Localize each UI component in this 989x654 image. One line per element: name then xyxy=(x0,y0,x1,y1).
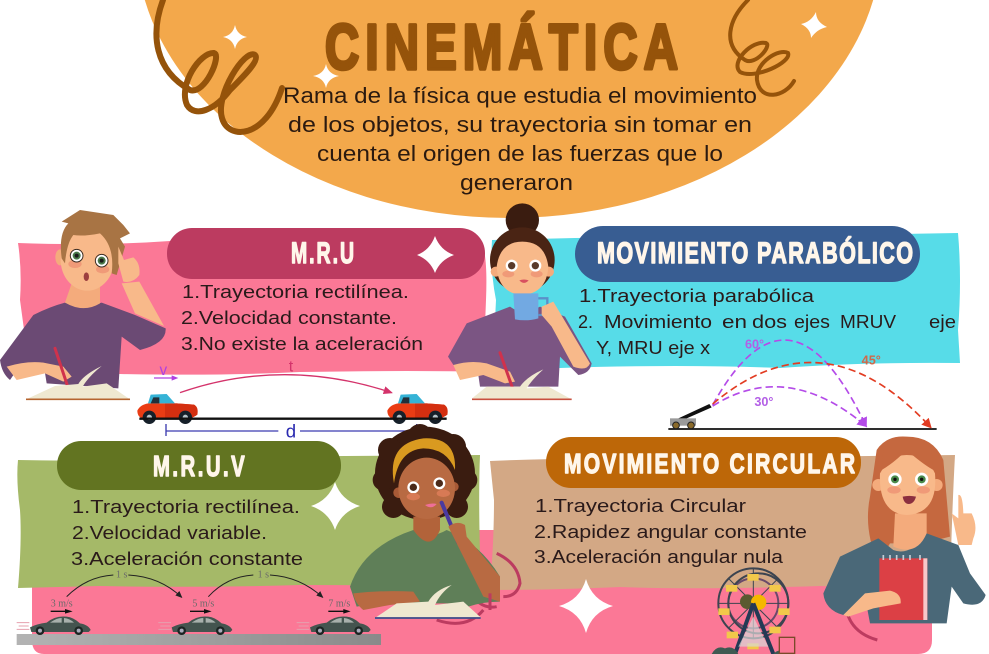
illustration: ferris wheel xyxy=(712,568,795,654)
diagram: uniform motion with cars: d xyxy=(286,420,296,441)
diagram: accelerated motion with cars: 5 m/s xyxy=(192,599,214,610)
list: M.R.U xyxy=(181,282,423,354)
list: circular motion xyxy=(534,496,807,567)
list: parabolic: 2. xyxy=(578,312,593,332)
diagram: uniform motion with cars: t xyxy=(289,359,294,376)
list: M.R.U.V: 1.Trayectoria rectilínea. xyxy=(72,497,300,517)
list: parabolic: eje xyxy=(929,312,956,332)
panel: M.R.U background xyxy=(18,241,487,375)
diagram: projectile trajectories with cannon xyxy=(668,337,937,429)
pill: M.R.U heading: M.R.U xyxy=(291,237,354,270)
diagram: uniform motion with cars xyxy=(137,359,448,441)
list: circular motion: 2.Rapidez angular constante xyxy=(534,522,807,542)
list: parabolic: en xyxy=(722,312,747,332)
decorative curl: left xyxy=(156,0,282,132)
sparkles: header xyxy=(223,12,827,88)
decorative curl: right xyxy=(730,0,794,95)
pill: M.R.U heading xyxy=(167,228,485,279)
list: M.R.U.V: 3.Aceleración constante xyxy=(71,549,303,569)
list: M.R.U: 2.Velocidad constante. xyxy=(181,308,397,328)
list: parabolic: ejes xyxy=(794,312,830,332)
pill: parabolic heading xyxy=(575,226,920,282)
illustration: curly-haired woman with pen xyxy=(350,424,500,623)
header: orange semicircle xyxy=(136,0,882,218)
diagram: projectile trajectories with cannon: 60° xyxy=(745,337,764,351)
panel: parabolic background xyxy=(492,233,960,372)
diagram: accelerated motion with cars: 1 s xyxy=(116,570,127,581)
list: circular motion: 3.Aceleración angular nula xyxy=(534,547,784,567)
diagram: accelerated motion with cars: 7 m/s xyxy=(328,599,350,610)
description text: generaron xyxy=(460,170,573,195)
sparkle: M.R.U pill xyxy=(417,236,454,273)
pill: parabolic heading: MOVIMIENTO PARABÓLICO xyxy=(597,235,913,270)
illustration: boy with book xyxy=(0,210,166,399)
panel: bottom pink background xyxy=(32,530,932,654)
description text: de los objetos, su trayectoria sin tomar en xyxy=(288,112,752,137)
diagram: accelerated motion with cars xyxy=(17,570,381,645)
pill: circular motion heading: MOVIMIENTO CIRCULAR xyxy=(564,449,855,480)
diagram: projectile trajectories with cannon: 45° xyxy=(862,354,881,368)
diagram: projectile trajectories with cannon: 30° xyxy=(754,395,773,409)
pill: M.R.U.V heading: M.R.U.V xyxy=(153,451,245,483)
list: parabolic: MRUV xyxy=(840,312,896,332)
illustration: woman with notebook pointing up xyxy=(490,436,986,640)
diagram: accelerated motion with cars: 3 m/s xyxy=(51,599,73,610)
list: parabolic: Y, MRU eje x xyxy=(596,338,710,358)
sparkle: M.R.U.V panel xyxy=(311,482,360,530)
diagram: accelerated motion with cars: 1 s xyxy=(258,570,269,581)
list: parabolic xyxy=(578,286,956,358)
list: M.R.U: 1.Trayectoria rectilínea. xyxy=(182,282,409,302)
diagram: uniform motion with cars: v xyxy=(159,362,167,379)
description text: cuenta el origen de las fuerzas que lo xyxy=(317,141,723,166)
title: CINEMÁTICA xyxy=(325,11,678,83)
list: parabolic: 1.Trayectoria parabólica xyxy=(579,286,815,306)
panel: M.R.U.V background xyxy=(17,455,481,588)
description text xyxy=(283,83,757,195)
sparkle: bottom pink xyxy=(559,579,613,633)
illustration: woman drinking from cup xyxy=(448,203,592,399)
list: circular motion: 1.Trayectoria Circular xyxy=(535,496,746,516)
panel: circular motion background xyxy=(490,455,955,590)
list: M.R.U: 3.No existe la aceleración xyxy=(181,334,423,354)
list: M.R.U.V: 2.Velocidad variable. xyxy=(72,523,267,543)
pill: M.R.U.V heading xyxy=(57,441,341,490)
pill: circular motion heading xyxy=(546,437,861,488)
list: parabolic: Movimiento xyxy=(604,312,712,332)
description text: Rama de la física que estudia el movimiento xyxy=(283,83,757,108)
list: parabolic: dos xyxy=(752,312,787,332)
list: M.R.U.V xyxy=(71,497,303,569)
